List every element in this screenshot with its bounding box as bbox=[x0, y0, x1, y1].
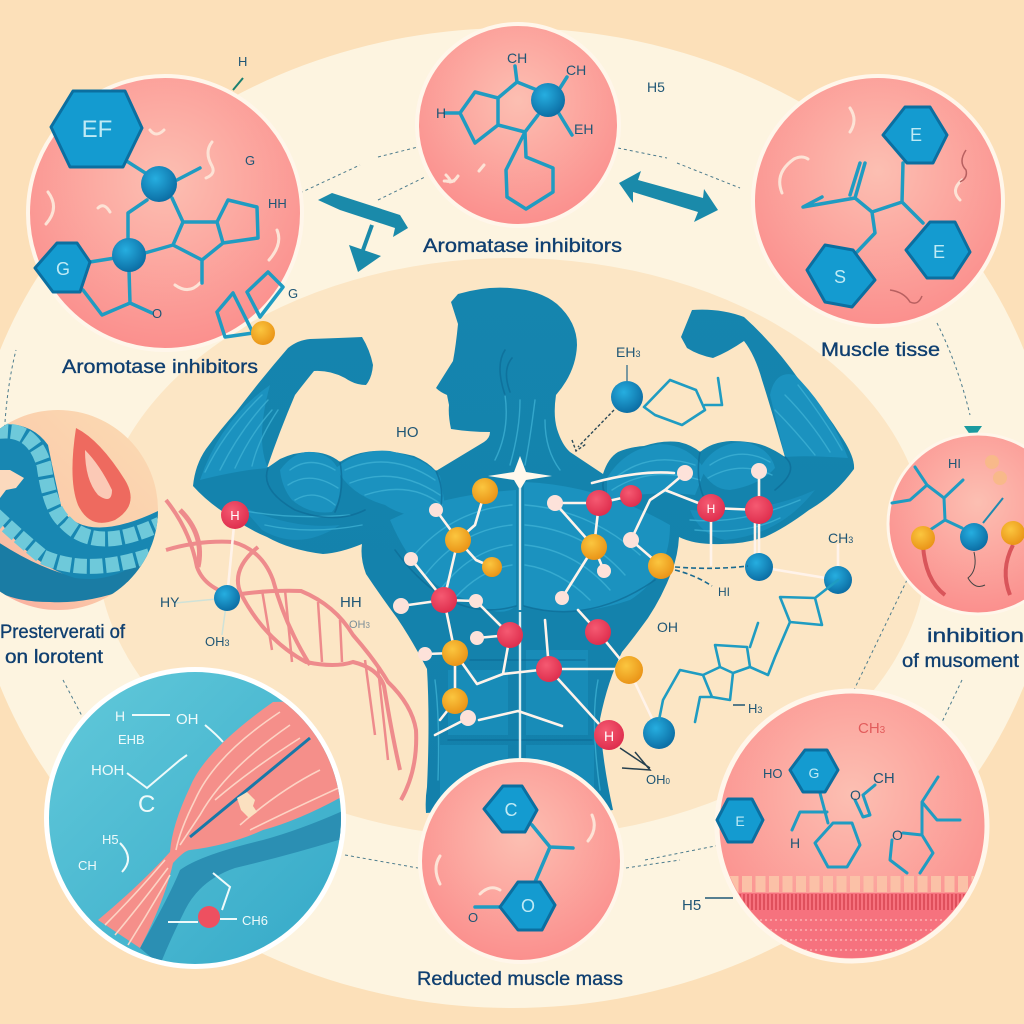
icon: hexagon E: E bbox=[735, 813, 745, 829]
panel: bottom left teal circle: C bbox=[138, 791, 155, 818]
panel: bottom right membrane circle: CH bbox=[873, 770, 895, 787]
panel: right receptor circle bbox=[888, 434, 1024, 614]
small chemical labels: HI bbox=[718, 585, 730, 599]
label: inhibition: inhibition bbox=[927, 626, 1024, 647]
panel: bottom right membrane circle: CH3 bbox=[858, 720, 886, 737]
icon: hexagon G: G bbox=[56, 259, 70, 279]
muscle bundles bbox=[200, 374, 848, 805]
small chemical labels: OH0 bbox=[646, 772, 670, 787]
panel: left tissue circle bbox=[0, 410, 160, 610]
small chemical labels: H3 bbox=[748, 701, 762, 716]
label: aromatase inhibitors left: Aromotase inhibitors bbox=[62, 357, 258, 378]
atom labels: G bbox=[288, 286, 298, 301]
label: H5 top: H5 bbox=[647, 79, 665, 95]
small chemical labels: OH3 bbox=[349, 619, 370, 631]
small chemical labels: H5 bbox=[682, 897, 701, 914]
icon: hexagon S bbox=[807, 245, 875, 307]
label: muscle tissue: Muscle tisse bbox=[821, 340, 940, 361]
icon: hexagon C bbox=[484, 786, 537, 832]
label: reduced muscle mass: Reducted muscle mass bbox=[417, 969, 623, 990]
blue atoms bbox=[214, 381, 852, 749]
label: top left formula: H bbox=[238, 54, 247, 69]
panel: bottom centre circle bbox=[420, 760, 622, 962]
atom labels: G bbox=[245, 153, 255, 168]
arrow: double headed bbox=[619, 171, 718, 222]
molecule network over torso: H bbox=[707, 502, 715, 516]
panel: bottom left teal circle: CH bbox=[78, 858, 97, 873]
icon: hexagon EF bbox=[51, 91, 142, 167]
small chemical labels bbox=[160, 344, 853, 914]
icon: hexagon EF: EF bbox=[82, 116, 112, 143]
icon: hexagon G: G bbox=[809, 765, 819, 781]
arrow: T-shaped down bbox=[318, 193, 408, 272]
panel: bottom right membrane circle: H bbox=[790, 835, 800, 851]
main figure: muscular body bbox=[193, 288, 854, 813]
pale atoms bbox=[393, 463, 767, 726]
label: of musoment: of musoment bbox=[902, 651, 1020, 672]
panel: top right molecule circle bbox=[753, 76, 1003, 326]
panel: top centre molecule circle bbox=[417, 24, 619, 226]
nodes bbox=[112, 166, 275, 345]
small chemical labels: OH3 bbox=[205, 634, 230, 649]
label: aromatase inhibitors top: Aromatase inhibitors bbox=[423, 236, 622, 257]
atom labels: HH bbox=[268, 196, 287, 211]
panel: bottom right membrane circle bbox=[715, 691, 990, 963]
small chemical labels: HY bbox=[160, 594, 180, 610]
icon: hexagon E right bbox=[906, 222, 970, 278]
label: preservation: Presterverati of bbox=[0, 622, 126, 643]
panel: bottom right membrane circle: HO bbox=[763, 766, 782, 781]
panel: top centre molecule circle: CH bbox=[507, 50, 527, 66]
molecule network over torso: H bbox=[604, 728, 614, 744]
icon: hexagon S: S bbox=[834, 267, 846, 287]
icon: hexagon O: O bbox=[521, 896, 535, 916]
icon: hexagon C: C bbox=[504, 800, 518, 820]
panel: right receptor circle: HI bbox=[948, 456, 961, 471]
red atoms bbox=[221, 485, 773, 750]
icon: hexagon E bbox=[717, 799, 763, 842]
label: on lorentent: on lorotent bbox=[5, 647, 104, 668]
molecule network over torso: H bbox=[230, 508, 240, 523]
icon: hexagon E top bbox=[883, 107, 947, 163]
atom labels: O bbox=[152, 306, 162, 321]
small chemical labels: OH bbox=[657, 619, 678, 635]
panel: top-left molecule circle bbox=[28, 76, 302, 350]
icon: hexagon G bbox=[35, 243, 90, 292]
panel: bottom left teal circle: HOH bbox=[91, 762, 124, 779]
panel: top centre molecule circle: H bbox=[436, 105, 446, 121]
panel: top centre molecule circle: EH bbox=[574, 121, 593, 137]
panel: bottom left teal circle: EHB bbox=[118, 732, 145, 747]
icon: hexagon G bbox=[790, 750, 838, 792]
molecule network over torso bbox=[175, 381, 852, 750]
panel: bottom right membrane circle: O bbox=[850, 787, 861, 803]
small chemical labels: HO bbox=[396, 424, 418, 441]
DNA helix bbox=[166, 500, 416, 800]
atom labels bbox=[152, 153, 298, 321]
icon: hexagon E top: E bbox=[910, 125, 922, 145]
panel: bottom left teal circle: H5 bbox=[102, 832, 119, 847]
icon: hexagon E right: E bbox=[933, 242, 945, 262]
panel: bottom left teal circle bbox=[44, 667, 346, 969]
panel: top centre molecule circle: CH bbox=[566, 62, 586, 78]
orange atoms bbox=[442, 478, 674, 714]
icon: hexagon O bbox=[500, 882, 555, 930]
panel: bottom left teal circle: OH bbox=[176, 711, 198, 728]
small chemical labels: EH3 bbox=[616, 344, 640, 360]
small chemical labels: HH bbox=[340, 594, 362, 611]
arrow: small triangle bbox=[964, 426, 982, 439]
molecule: right side chain bbox=[572, 365, 838, 898]
panel: bottom left teal circle: H bbox=[115, 708, 125, 724]
small chemical labels: CH3 bbox=[828, 530, 853, 546]
panel: bottom centre circle: O bbox=[468, 910, 478, 925]
panel: bottom right membrane circle: O bbox=[892, 827, 903, 843]
panel: bottom left teal circle: CH6 bbox=[242, 913, 268, 928]
label: top left formula bbox=[233, 54, 247, 90]
